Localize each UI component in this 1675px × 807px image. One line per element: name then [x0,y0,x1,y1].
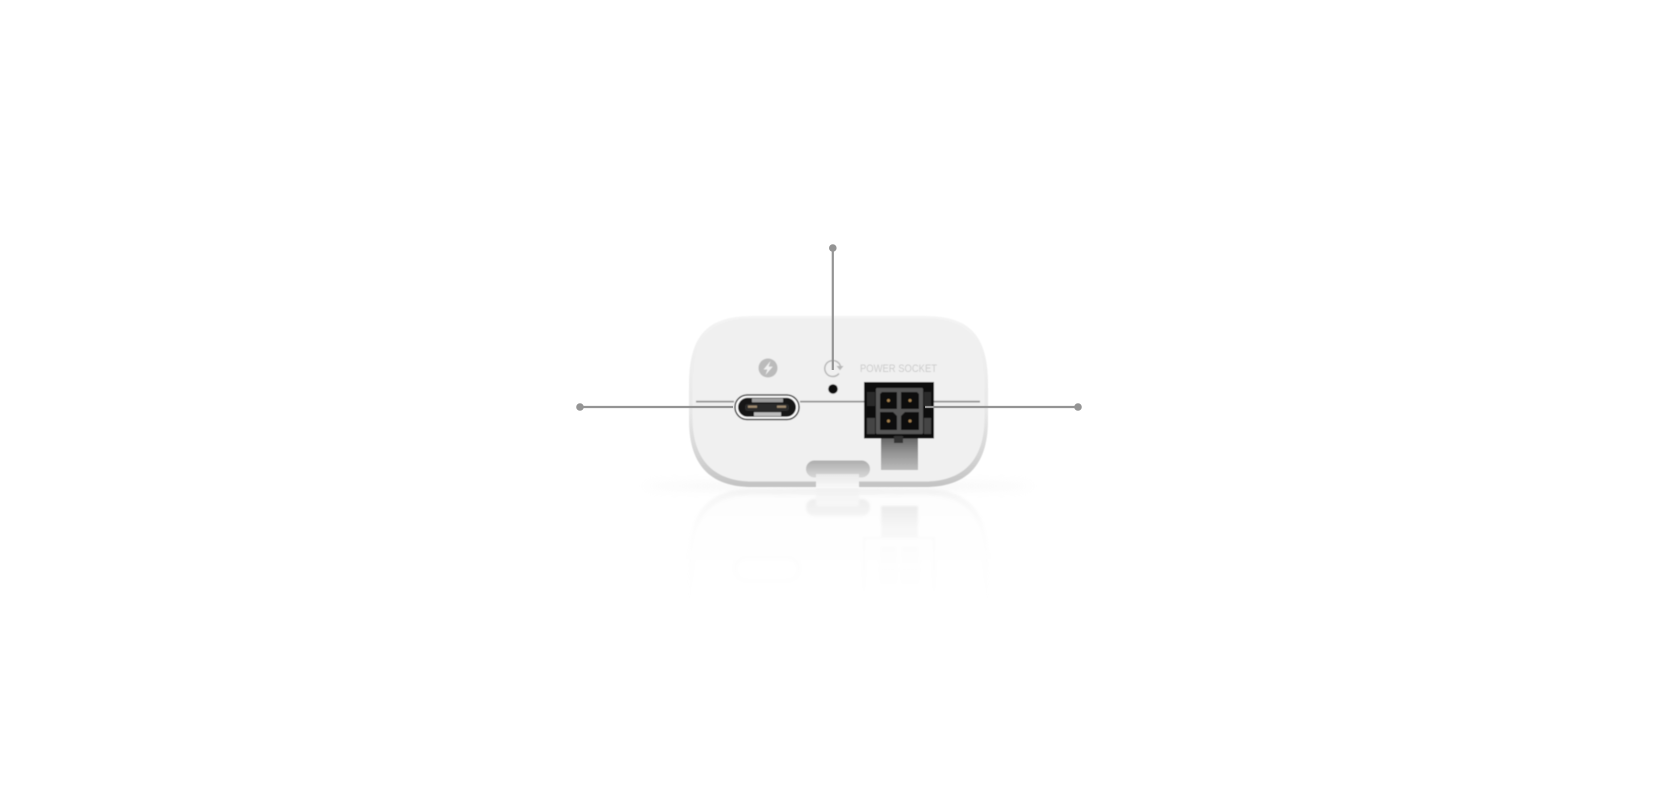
callout: power socket [925,403,1082,411]
reset button hole [828,384,838,394]
device reflection [728,489,950,528]
device body [689,316,988,487]
socket tab [881,438,918,470]
faint inner lines [696,401,980,402]
power socket [864,382,934,443]
device [689,316,988,488]
power socket label: POWER SOCKET [860,363,937,375]
USB-C port [735,395,799,420]
device face [692,318,984,482]
ground shadow [643,483,1033,489]
callout: USB-C port [576,403,733,411]
mounting slot [806,460,870,488]
icon: reset [825,361,844,377]
callout: reset button [829,244,837,370]
icon: lightning bolt [758,358,778,378]
